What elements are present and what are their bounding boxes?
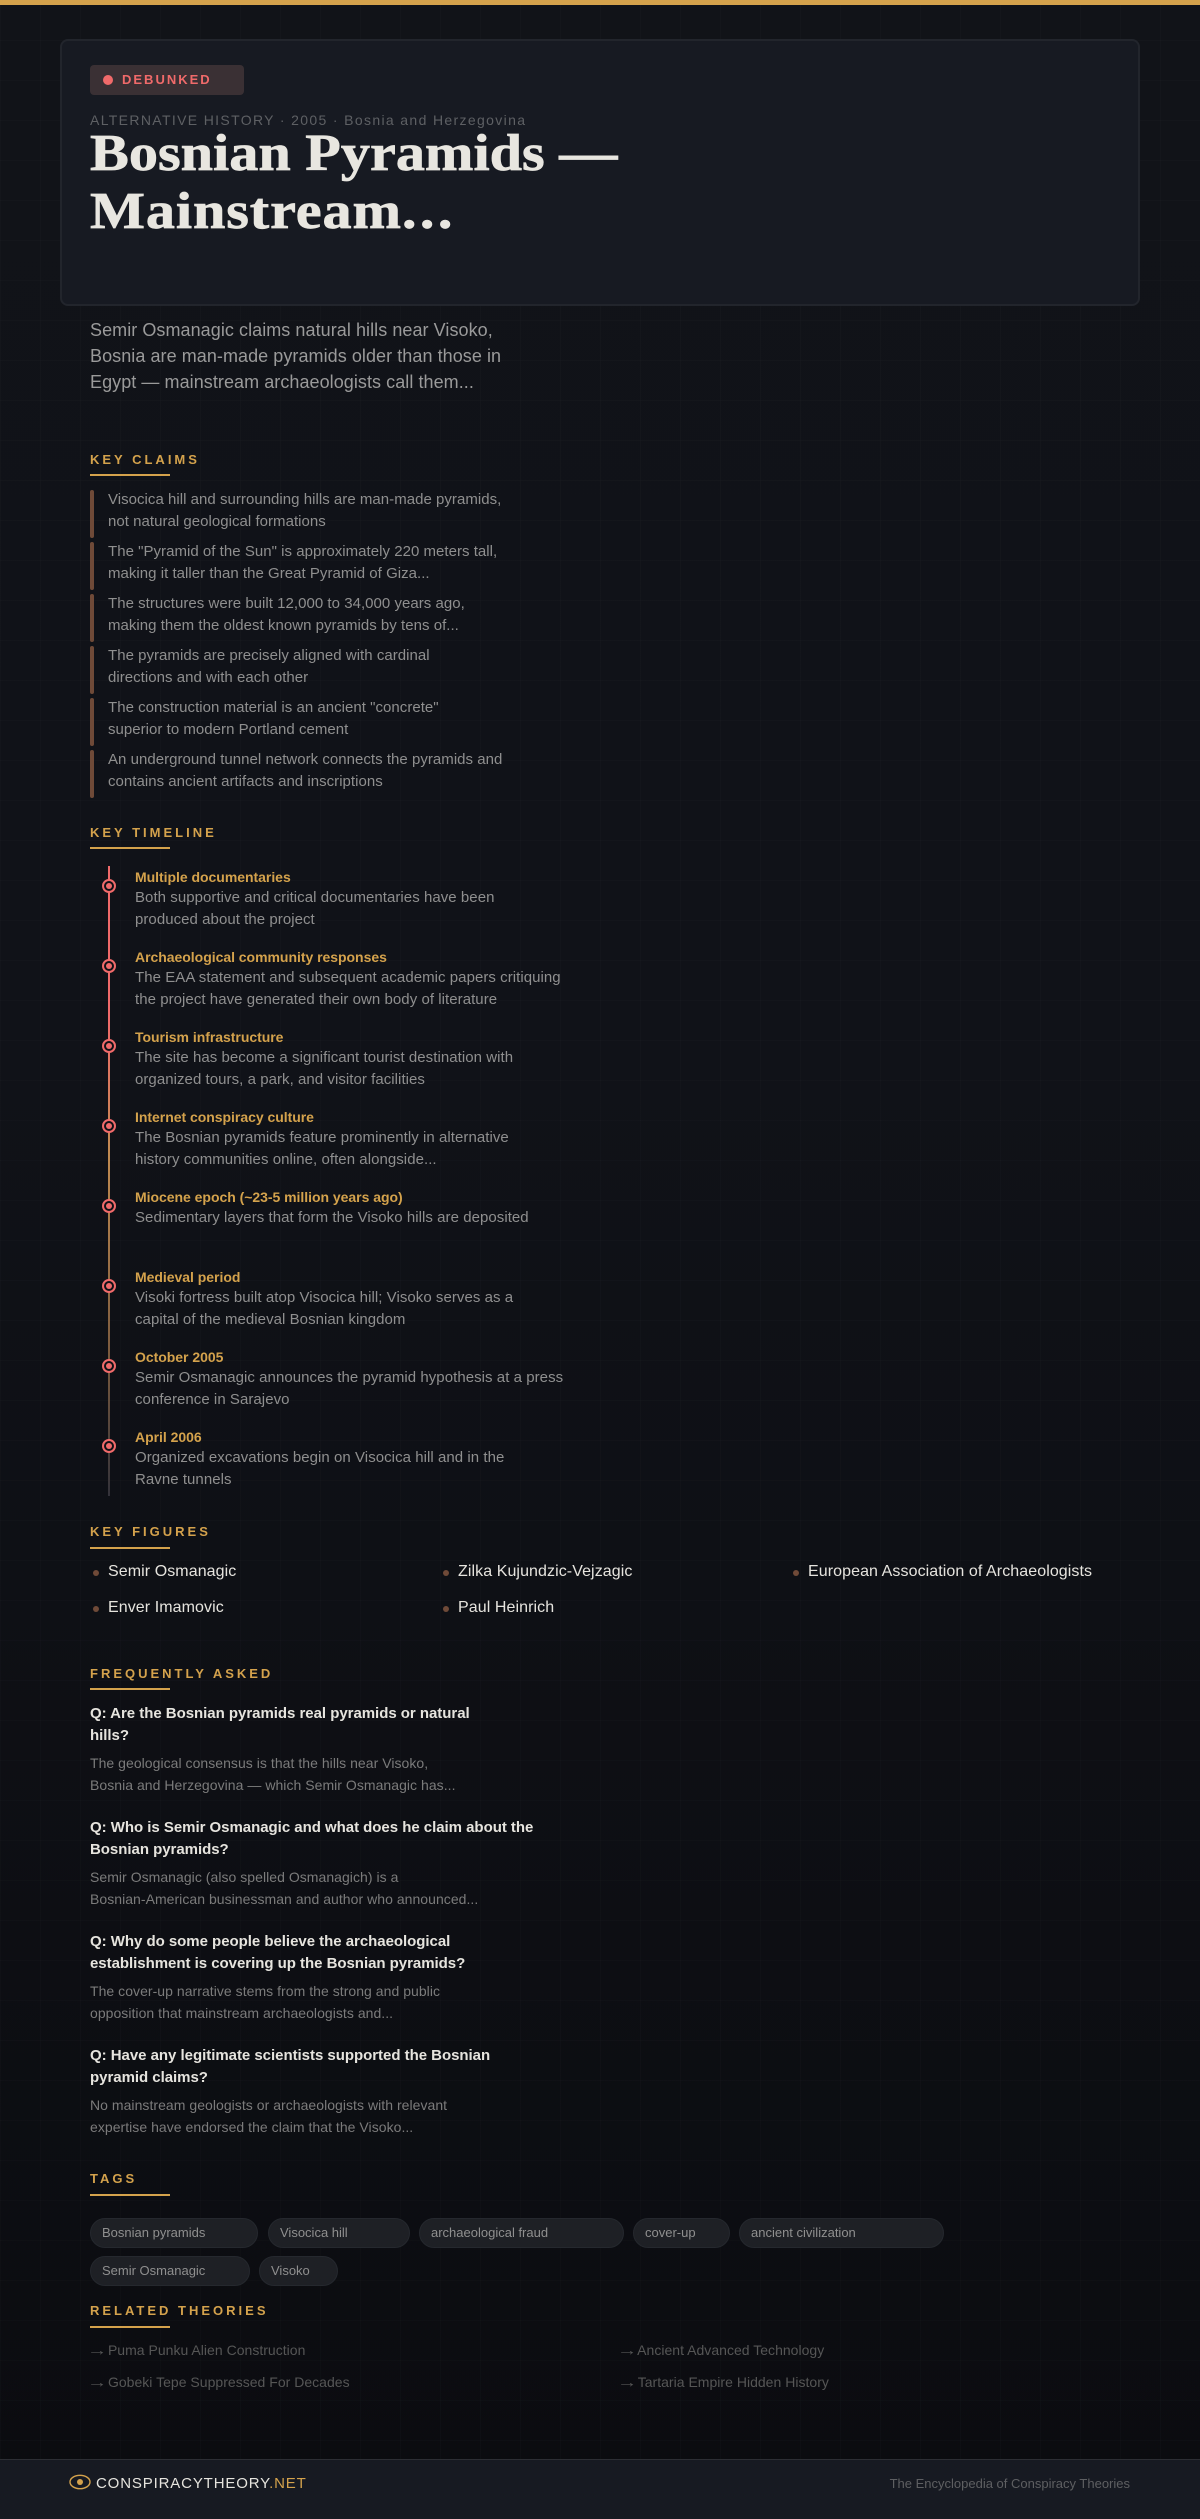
intro summary: Egypt — mainstream archaeologists call them...	[90, 372, 474, 392]
event: april 2006: Organized excavations begin on Visocica hill and in the	[135, 1449, 504, 1466]
claim 1: not natural geological formations	[108, 513, 326, 530]
event: october 2005: conference in Sarajevo	[135, 1391, 290, 1408]
heading: key timeline: KEY TIMELINE	[90, 825, 217, 840]
tag: ancient civilization: ancient civilization	[751, 2225, 856, 2240]
heading: key claims: KEY CLAIMS	[90, 452, 200, 467]
panel: FAQ list	[90, 1705, 533, 2135]
FAQ item 1: hills?	[90, 1727, 129, 1744]
tag: cover-up: cover-up	[645, 2225, 696, 2240]
FAQ item 4: pyramid claims?	[90, 2069, 208, 2086]
claim 4: The pyramids are precisely aligned with cardinal	[108, 647, 430, 664]
event: community responses: The EAA statement and subsequent academic papers critiquing	[135, 969, 561, 986]
FAQ item 2: Semir Osmanagic (also spelled Osmanagich) is a	[90, 1869, 398, 1885]
heading: frequently asked: FREQUENTLY ASKED	[90, 1666, 273, 1681]
figure: European Association of Archaeologists: European Association of Archaeologists	[808, 1562, 1092, 1580]
FAQ item 2: Bosnian pyramids?	[90, 1841, 229, 1858]
tag: Semir Osmanagic	[90, 2256, 250, 2286]
icon: eye logo	[69, 2474, 91, 2490]
event: multiple documentaries: produced about the project	[135, 911, 315, 928]
tag: ancient civilization	[739, 2218, 944, 2248]
link: Gobeki Tepe: Gobeki Tepe Suppressed For Decades	[108, 2374, 350, 2390]
event: miocene epoch	[102, 1189, 529, 1226]
claim 3: making them the oldest known pyramids by tens of...	[108, 617, 459, 634]
FAQ item 4: No mainstream geologists or archaeologists with relevant	[90, 2097, 447, 2113]
event: internet conspiracy culture: Internet conspiracy culture	[135, 1109, 314, 1125]
claim 1	[90, 490, 501, 538]
panel: key figures list	[93, 1562, 1092, 1616]
title	[90, 125, 618, 240]
link: Ancient Advanced Technology: Ancient Advanced Technology	[637, 2342, 824, 2358]
tag: Visocica hill	[268, 2218, 410, 2248]
event: community responses: Archaeological community responses	[135, 949, 387, 965]
event: miocene epoch: Miocene epoch (~23-5 million years ago)	[135, 1189, 403, 1205]
claim 4	[90, 646, 430, 694]
icon: status dot	[103, 75, 113, 85]
intro summary: Semir Osmanagic claims natural hills near Visoko,	[90, 320, 493, 340]
FAQ item 4: Q: Have any legitimate scientists supported the Bosnian	[90, 2047, 490, 2064]
event: internet conspiracy culture: history communities online, often alongside...	[135, 1151, 437, 1168]
event: april 2006	[102, 1429, 504, 1488]
event: multiple documentaries: Multiple documentaries	[135, 869, 291, 885]
claim 6: An underground tunnel network connects the pyramids and	[108, 751, 502, 768]
footer	[0, 2459, 1200, 2519]
figure: Enver Imamovic: Enver Imamovic	[108, 1599, 224, 1616]
logo wordmark: CONSPIRACYTHEORY.NET	[96, 2475, 307, 2492]
event: multiple documentaries	[102, 869, 494, 928]
tag: cover-up	[633, 2218, 730, 2248]
claim 3: The structures were built 12,000 to 34,000 years ago,	[108, 595, 465, 612]
heading: tags: TAGS	[90, 2171, 137, 2186]
claim 6	[90, 750, 502, 798]
link: Gobeki Tepe: →	[87, 2374, 107, 2390]
claim 1: Visocica hill and surrounding hills are man-made pyramids,	[108, 491, 501, 508]
figure: Semir Osmanagic: Semir Osmanagic	[108, 1562, 236, 1580]
event: internet conspiracy culture	[102, 1109, 509, 1168]
event: medieval period: Medieval period	[135, 1269, 240, 1285]
badge label: DEBUNKED	[122, 72, 212, 87]
link: Tartaria Empire: →	[617, 2374, 637, 2390]
FAQ item 3	[90, 1933, 465, 2021]
tag: archaeological fraud: archaeological fraud	[431, 2225, 548, 2240]
heading: key figures: KEY FIGURES	[90, 1524, 211, 1539]
link: Tartaria Empire: Tartaria Empire Hidden History	[638, 2374, 829, 2390]
FAQ item 1: Q: Are the Bosnian pyramids real pyramids or natural	[90, 1705, 470, 1722]
claim 5	[90, 698, 439, 746]
panel: claims list	[90, 490, 502, 798]
tag: Bosnian pyramids	[90, 2218, 258, 2248]
tag: Visoko: Visoko	[271, 2263, 310, 2278]
tag: archaeological fraud	[419, 2218, 624, 2248]
FAQ item 2	[90, 1819, 533, 1907]
claim 5: The construction material is an ancient "concrete"	[108, 699, 439, 716]
event: community responses: the project have generated their own body of literature	[135, 991, 497, 1008]
tag: Visocica hill: Visocica hill	[280, 2225, 348, 2240]
claim 2: making it taller than the Great Pyramid of Giza...	[108, 565, 430, 582]
claim 3	[90, 594, 465, 642]
event: april 2006: April 2006	[135, 1429, 202, 1445]
title: Mainstream...	[90, 183, 456, 240]
claim 2: The "Pyramid of the Sun" is approximately 220 meters tall,	[108, 543, 497, 560]
event: april 2006: Ravne tunnels	[135, 1471, 232, 1488]
FAQ item 2: Bosnian-American businessman and author who announced...	[90, 1891, 478, 1907]
event: miocene epoch: Sedimentary layers that form the Visoko hills are deposited	[135, 1209, 529, 1226]
event: medieval period: Visoki fortress built atop Visocica hill; Visoko serves as a	[135, 1289, 513, 1306]
claim 5: superior to modern Portland cement	[108, 721, 348, 738]
link: Ancient Advanced Technology: →	[617, 2342, 637, 2358]
FAQ item 4	[90, 2047, 490, 2135]
timeline spine	[108, 866, 110, 1496]
intro summary	[90, 320, 501, 392]
event: medieval period: capital of the medieval Bosnian kingdom	[135, 1311, 405, 1328]
FAQ item 1	[90, 1705, 470, 1793]
title: Bosnian Pyramids —	[90, 125, 618, 182]
heading: related theories: RELATED THEORIES	[90, 2303, 268, 2318]
FAQ item 3: Q: Why do some people believe the archaeological	[90, 1933, 450, 1950]
event: internet conspiracy culture: The Bosnian pyramids feature prominently in alternative	[135, 1129, 509, 1146]
FAQ item 3: opposition that mainstream archaeologists and...	[90, 2005, 393, 2021]
link: Puma Punku: Puma Punku Alien Construction	[108, 2342, 305, 2358]
claim 4: directions and with each other	[108, 669, 308, 686]
status badge: debunked	[90, 65, 244, 95]
top accent bar	[0, 0, 1200, 5]
event: tourism infrastructure: Tourism infrastructure	[135, 1029, 283, 1045]
FAQ item 4: expertise have endorsed the claim that the Visoko...	[90, 2119, 413, 2135]
event: tourism infrastructure: organized tours, a park, and visitor facilities	[135, 1071, 425, 1088]
tag: Bosnian pyramids: Bosnian pyramids	[102, 2225, 205, 2240]
figure: Paul Heinrich: Paul Heinrich	[458, 1599, 554, 1616]
event: community responses	[102, 949, 561, 1008]
event: october 2005: Semir Osmanagic announces the pyramid hypothesis at a press	[135, 1369, 563, 1386]
panel: tags	[90, 2218, 944, 2286]
intro summary: Bosnia are man-made pyramids older than those in	[90, 346, 501, 366]
figure: Zilka Kujundzic-Vejzagic: Zilka Kujundzic-Vejzagic	[458, 1562, 632, 1580]
event: tourism infrastructure	[102, 1029, 513, 1088]
FAQ item 1: The geological consensus is that the hills near Visoko,	[90, 1755, 428, 1771]
panel: hero header	[60, 39, 1140, 306]
event: multiple documentaries: Both supportive and critical documentaries have been	[135, 889, 494, 906]
tag: Semir Osmanagic: Semir Osmanagic	[102, 2263, 205, 2278]
claim 2	[90, 542, 497, 590]
event: october 2005	[102, 1349, 563, 1408]
link: Puma Punku: →	[87, 2342, 107, 2358]
event: medieval period	[102, 1269, 514, 1328]
FAQ item 3: The cover-up narrative stems from the strong and public	[90, 1983, 440, 1999]
FAQ item 1: Bosnia and Herzegovina — which Semir Osmanagic has...	[90, 1777, 456, 1793]
panel: related theories links	[87, 2342, 829, 2390]
event: tourism infrastructure: The site has become a significant tourist destination with	[135, 1049, 513, 1066]
FAQ item 2: Q: Who is Semir Osmanagic and what does he claim about the	[90, 1819, 533, 1836]
chart: timeline	[102, 866, 563, 1496]
FAQ item 3: establishment is covering up the Bosnian pyramids?	[90, 1955, 465, 1972]
event: october 2005: October 2005	[135, 1349, 223, 1365]
tag: Visoko	[259, 2256, 338, 2286]
category meta line: ALTERNATIVE HISTORY · 2005 · Bosnia and Herzegovina	[90, 112, 526, 128]
footer tagline: The Encyclopedia of Conspiracy Theories	[890, 2476, 1130, 2491]
claim 6: contains ancient artifacts and inscriptions	[108, 773, 383, 790]
